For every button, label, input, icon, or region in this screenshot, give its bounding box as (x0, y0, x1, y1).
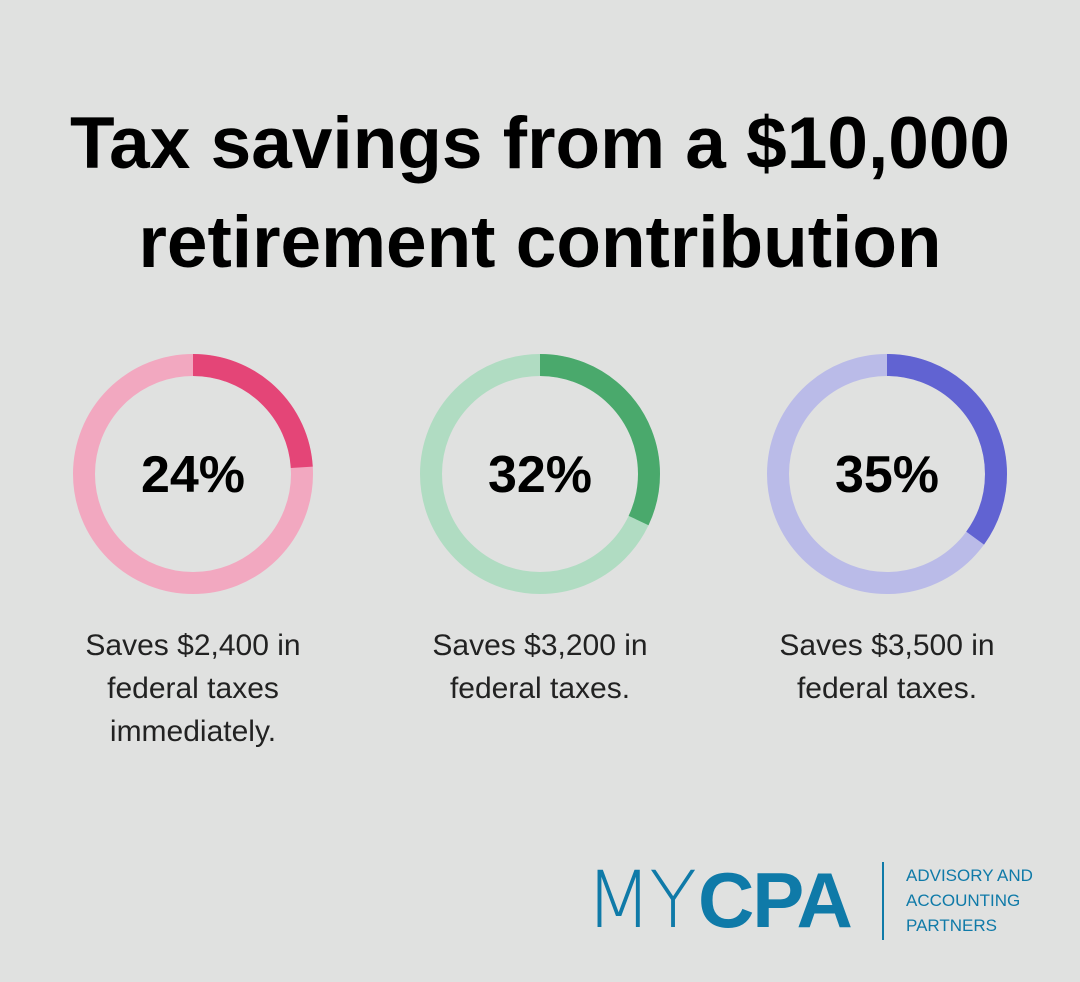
logo tagline: ADVISORY AND (906, 866, 1033, 885)
caption: 24%: federal taxes (107, 672, 279, 705)
donut: 24%: 24% (141, 446, 245, 504)
caption: 32%: Saves $3,200 in (432, 629, 648, 662)
caption: 35%: Saves $3,500 in (779, 629, 995, 662)
logo divider (882, 862, 884, 940)
caption: 32%: federal taxes. (450, 672, 630, 705)
donut: 35%: 35% (835, 446, 939, 504)
donut: 32% (431, 365, 649, 583)
title: retirement contribution (138, 202, 942, 283)
logo tagline (906, 866, 1033, 935)
caption: 35%: federal taxes. (797, 672, 977, 705)
donut: 35% (778, 365, 996, 583)
caption: 24%: Saves $2,400 in (85, 629, 301, 662)
caption: 32% (432, 629, 648, 705)
caption: 24% (85, 629, 301, 748)
donut: 32%: 32% (488, 446, 592, 504)
logo tagline: ACCOUNTING (906, 891, 1020, 910)
logo wordmark: MYCPA (585, 856, 851, 946)
title: Tax savings from a $10,000 (70, 103, 1010, 184)
logo tagline: PARTNERS (906, 916, 997, 935)
logo (585, 856, 1033, 946)
caption: 24%: immediately. (110, 715, 276, 748)
title (70, 103, 1010, 283)
caption: 35% (779, 629, 995, 705)
donut: 24% (84, 365, 302, 583)
